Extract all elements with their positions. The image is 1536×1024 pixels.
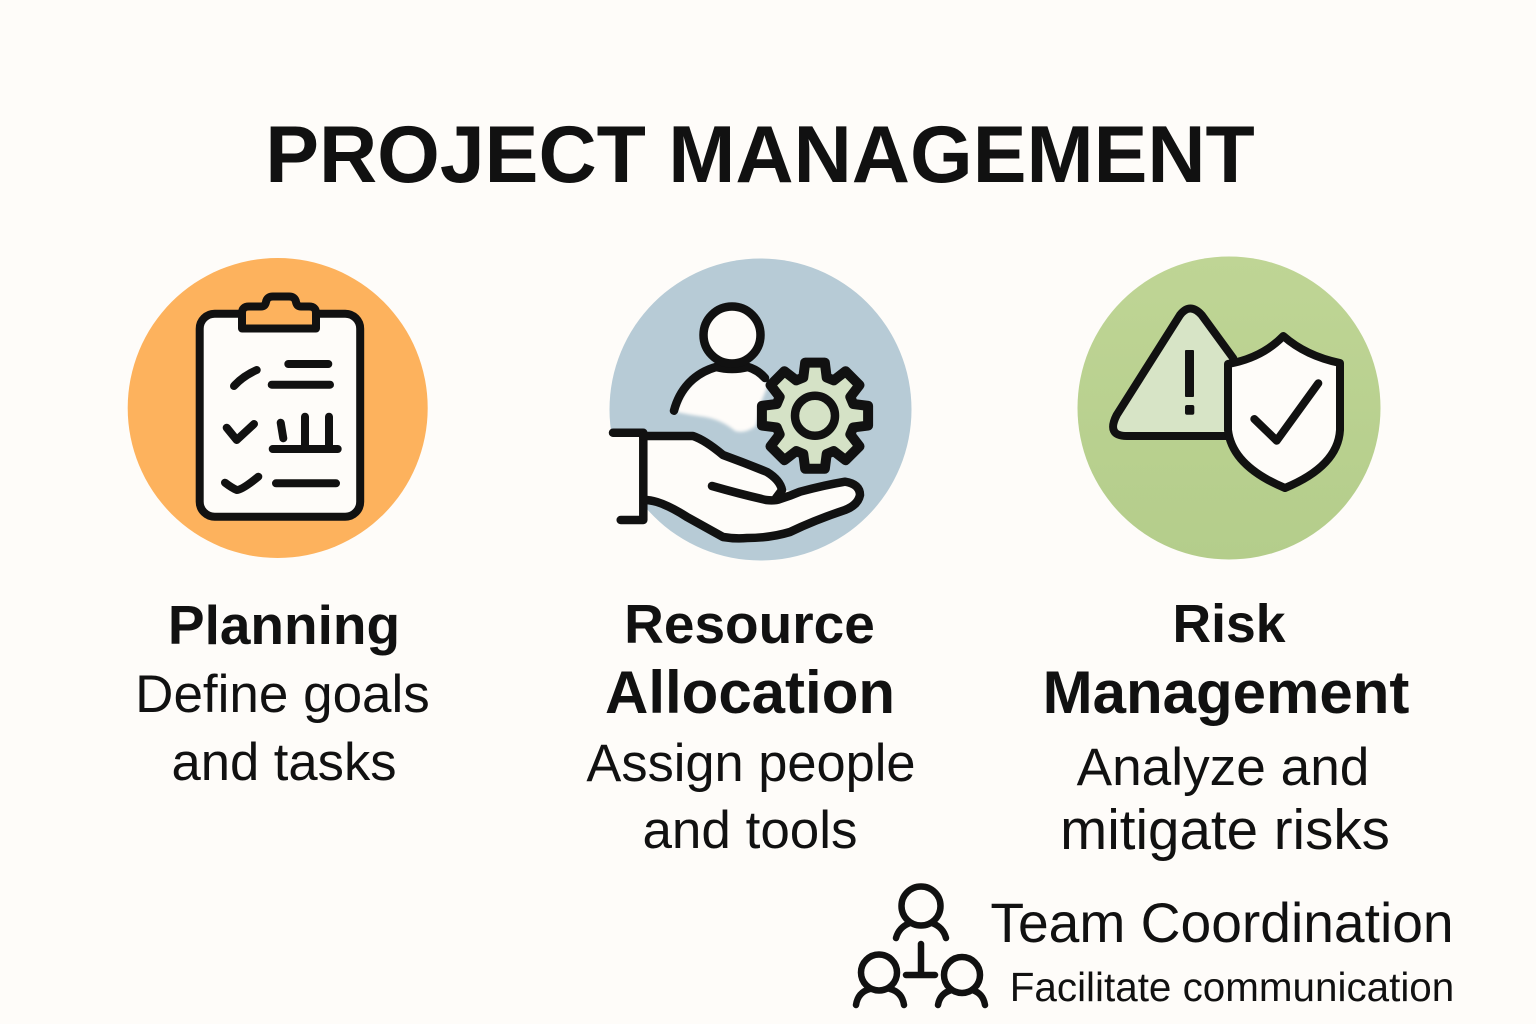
team coordination description: Facilitate communication [1010,964,1454,1010]
resource allocation label line 2: Allocation [605,659,895,726]
icon: resource allocation [608,258,912,560]
icon: planning clipboard [128,258,428,558]
planning label: Planning [168,594,400,656]
resource allocation description line 2: and tools [642,801,858,860]
person body fill [676,364,768,432]
risk management description line 1: Analyze and [1077,738,1369,796]
panel: resource allocation [586,258,916,860]
risk management label line 1: Risk [1172,595,1286,654]
panel: risk management [1043,256,1409,861]
planning description line 2: and tasks [171,732,397,792]
resource allocation description line 1: Assign people [586,735,916,793]
icon: team coordination [852,883,988,1008]
resource allocation label line 1: Resource [624,593,875,655]
panel: team coordination [852,883,1454,1010]
hand fill [643,436,860,538]
title: PROJECT MANAGEMENT [265,110,1255,200]
icon: risk management [1078,256,1380,560]
risk management description line 2: mitigate risks [1060,798,1390,861]
team coordination heading: Team Coordination [990,892,1454,954]
panel: planning [128,258,430,792]
white area beside cuff [606,437,643,527]
risk management label line 2: Management [1043,659,1409,726]
planning description line 1: Define goals [135,665,430,724]
